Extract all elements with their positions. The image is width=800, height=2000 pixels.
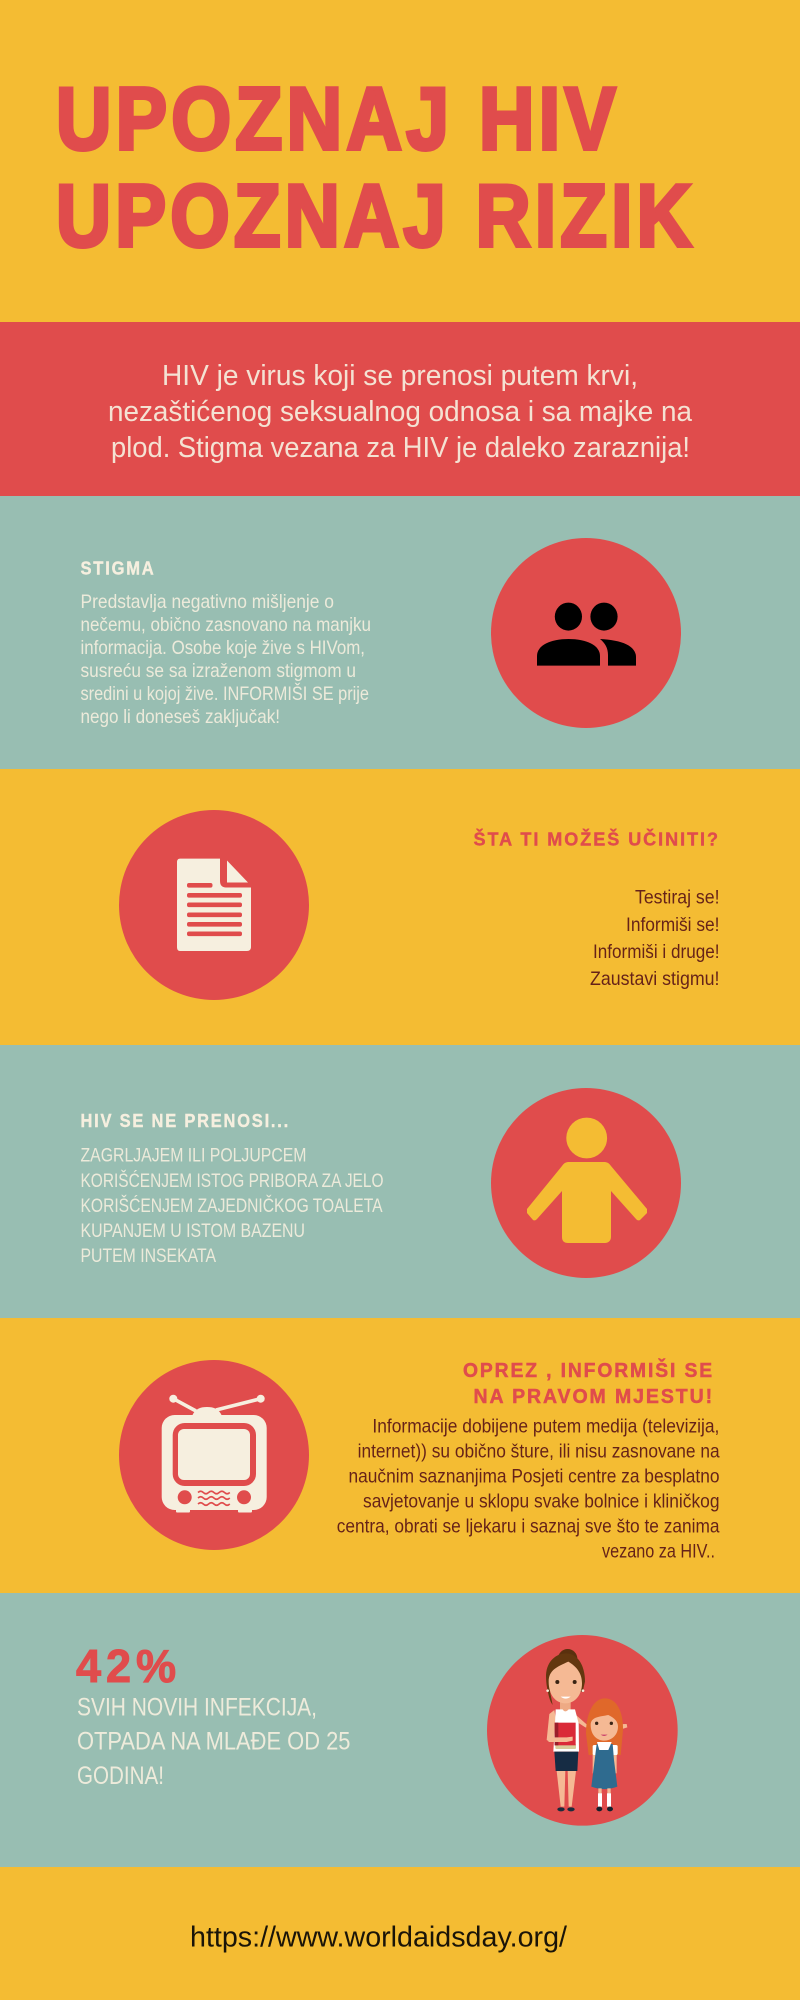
panel: how HIV is not transmitted [0, 1045, 800, 1318]
statistic: 42%: 42% [76, 1640, 181, 1692]
caution body text: Informacije dobijene putem medija (televizija, [372, 1416, 719, 1438]
list of non-transmission routes: KUPANJEM U ISTOM BAZENU [80, 1220, 305, 1242]
heading: caution [463, 1358, 714, 1408]
intro text [108, 360, 693, 464]
statistic description: SVIH NOVIH INFEKCIJA, [77, 1694, 317, 1722]
illustration: woman and girl [487, 1635, 678, 1826]
panel: caution [0, 1318, 800, 1593]
list of non-transmission routes: KORIŠĆENJEM ISTOG PRIBORA ZA JELO [80, 1169, 384, 1192]
caution body text: internet)) su obično šture, ili nisu zasnovane na [358, 1440, 720, 1462]
list of non-transmission routes: PUTEM INSEKATA [80, 1245, 216, 1267]
panel: what you can do [0, 769, 800, 1045]
stigma body text [80, 591, 371, 728]
heading: what you can do: ŠTA TI MOŽEŠ UČINITI? [474, 828, 720, 850]
intro text: plod. Stigma vezana za HIV je daleko zaraznija! [111, 432, 690, 464]
title line 1: UPOZNAJ HIV [56, 69, 620, 168]
stigma body text: informacija. Osobe koje žive s HIVom, [80, 637, 365, 659]
statistic description: OTPADA NA MLAĐE OD 25 [77, 1728, 350, 1756]
stigma body text: nečemu, obično zasnovano na manjku [80, 614, 371, 636]
heading: caution: OPREZ , INFORMIŠI SE [463, 1358, 714, 1382]
caution body text: naučnim saznanjima Posjeti centre za besplatno [348, 1466, 720, 1488]
girl [586, 1698, 623, 1811]
action list: Testiraj se! [635, 886, 720, 908]
heading: stigma: STIGMA [80, 558, 156, 578]
caution body text: vezano za HIV.. [602, 1540, 715, 1562]
panel: intro [0, 322, 800, 496]
stigma body text: nego li doneseš zaključak! [80, 706, 280, 728]
list of non-transmission routes: ZAGRLJAJEM ILI POLJUPCEM [80, 1144, 306, 1166]
panel: footer [0, 1867, 800, 2000]
panel: stigma [0, 496, 800, 769]
stigma body text: sredini u kojoj žive. INFORMIŠI SE prije [80, 682, 369, 705]
icon: television [119, 1360, 309, 1550]
statistic description: GODINA! [77, 1762, 164, 1790]
heading: caution: NA PRAVOM MJESTU! [474, 1385, 714, 1408]
stigma body text: susreću se sa izraženom stigmom u [80, 660, 356, 682]
intro text: HIV je virus koji se prenosi putem krvi, [162, 360, 638, 392]
heading: HIV is not transmitted: HIV SE NE PRENOSI... [80, 1110, 290, 1131]
icon: person [491, 1088, 681, 1278]
list of non-transmission routes [80, 1144, 384, 1267]
website link: https://www.worldaidsday.org/ [190, 1922, 568, 1954]
caution body text: centra, obrati se ljekaru i saznaj sve što te zanima [337, 1516, 720, 1538]
action list: Zaustavi stigmu! [590, 968, 720, 990]
icon: people [491, 538, 681, 728]
woman [546, 1649, 627, 1811]
stigma body text: Predstavlja negativno mišljenje o [80, 591, 334, 613]
icon: document [119, 810, 309, 1000]
action list [590, 886, 720, 990]
statistic description [77, 1694, 350, 1790]
panel: title [0, 0, 800, 322]
caution body text: savjetovanje u sklopu svake bolnice i kliničkog [363, 1490, 720, 1512]
action list: Informiši se! [626, 914, 720, 936]
title line 2: UPOZNAJ RIZIK [56, 166, 696, 265]
list of non-transmission routes: KORIŠĆENJEM ZAJEDNIČKOG TOALETA [80, 1194, 382, 1217]
intro text: nezaštićenog seksualnog odnosa i sa majke na [108, 396, 693, 428]
caution body text [337, 1416, 720, 1562]
action list: Informiši i druge! [593, 941, 720, 963]
panel: statistic [0, 1593, 800, 1867]
